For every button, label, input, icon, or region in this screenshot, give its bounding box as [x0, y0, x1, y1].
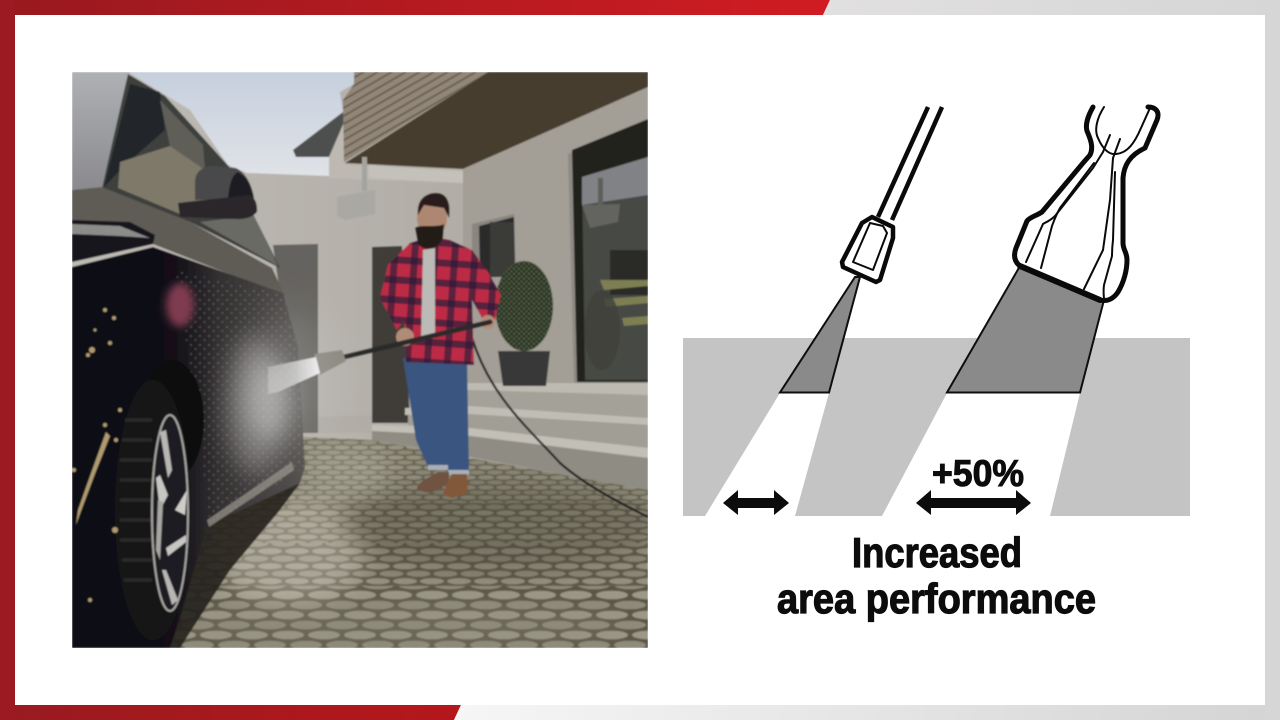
small window	[472, 214, 516, 280]
small width arrow	[723, 490, 789, 515]
side windows	[102, 74, 280, 268]
caption line two: area performance	[777, 575, 1096, 622]
large width arrow	[916, 490, 1031, 515]
window dark reflection	[104, 84, 165, 187]
left door recess	[273, 244, 318, 433]
centre door	[372, 246, 410, 423]
door mist	[225, 335, 285, 475]
tyre tread	[120, 420, 152, 580]
man	[380, 193, 501, 498]
tyre	[115, 380, 191, 640]
upper wall corner	[328, 126, 462, 178]
flannel shirt	[380, 236, 501, 365]
timber siding	[343, 72, 488, 162]
t-shirt	[421, 248, 435, 340]
car	[72, 72, 305, 648]
car door and body	[72, 247, 305, 648]
caption line one: Increased	[852, 529, 1022, 576]
diagram: spray nozzle comparison	[683, 107, 1190, 622]
reflected pink shirt	[166, 283, 194, 327]
shoulder strip	[72, 187, 285, 296]
wide jet	[947, 266, 1104, 392]
spray speckle on door	[175, 270, 305, 525]
wheel arch	[140, 360, 204, 480]
wing mirror cap	[195, 166, 254, 200]
plant pot	[498, 351, 550, 386]
entrance steps	[372, 383, 648, 490]
porch ceiling	[345, 72, 648, 169]
head	[416, 204, 448, 230]
jeans cuffs	[428, 465, 469, 475]
wall base	[318, 415, 372, 433]
hair	[418, 193, 450, 218]
cobbled driveway	[170, 432, 660, 653]
mud splashes	[72, 308, 122, 602]
beard	[415, 224, 444, 249]
underbody shadow	[170, 483, 300, 648]
wall right section	[463, 87, 648, 395]
wide nozzle	[1015, 107, 1158, 301]
spray haze	[250, 310, 330, 450]
beam	[370, 165, 386, 168]
house wall	[72, 72, 648, 484]
standard jet	[780, 277, 860, 392]
sky	[128, 72, 354, 176]
vario nozzle	[314, 350, 346, 375]
pressure hose	[472, 338, 648, 517]
porch roof edge	[293, 112, 344, 157]
roof pillar	[72, 72, 130, 190]
grey surface with cleaned strips	[683, 338, 1190, 516]
shoes	[417, 472, 468, 498]
rear window glass	[160, 100, 205, 170]
lower window	[200, 212, 278, 266]
left hand	[396, 328, 414, 346]
side sill highlight	[207, 462, 294, 527]
topiary plant	[495, 261, 553, 351]
window reflection of house	[118, 146, 210, 214]
water jet	[268, 357, 320, 394]
large window	[568, 119, 648, 383]
mirror arm	[178, 195, 257, 219]
photo: man pressure-washing a car	[72, 72, 660, 653]
standard lance tube	[878, 107, 942, 220]
spray wand	[340, 322, 490, 358]
jeans	[403, 358, 469, 473]
pipe and box	[337, 157, 375, 220]
standard nozzle	[842, 217, 893, 282]
spray cloud	[246, 360, 290, 440]
headlight	[72, 220, 155, 262]
right hand	[481, 315, 495, 329]
+50% label: +50%	[932, 453, 1024, 494]
alloy wheel	[152, 415, 188, 611]
mirror dark glass	[228, 172, 254, 198]
